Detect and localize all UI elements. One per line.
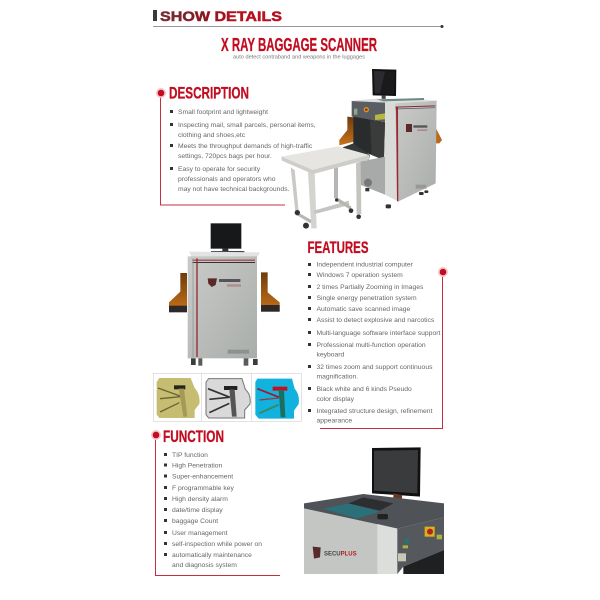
panel: function (151, 427, 280, 576)
panel: description (156, 84, 316, 205)
x-ray bag: grayscale (206, 379, 250, 418)
features list: Professional multi-function operation (316, 342, 426, 349)
features list: 32 times zoom and support continuous (316, 364, 433, 371)
features list: Assist to detect explosive and narcotics (316, 317, 435, 324)
photo: scanner console close-up (304, 447, 444, 574)
function list: TIP function (172, 452, 208, 459)
description list: Small footprint and lightweight (178, 109, 268, 116)
description list: Easy to operate for security (178, 166, 261, 173)
function list: self-inspection while power on (172, 541, 262, 548)
icon: function marker (151, 430, 161, 440)
function list: baggage Count (172, 518, 218, 525)
function list: F programmable key (172, 485, 235, 492)
function list: and diagnosis system (172, 562, 237, 569)
description list: Inspecting mail, small parcels, personal items, (178, 122, 316, 129)
photo: scanner console close-up: SECUPLUS (324, 551, 357, 557)
features list: Integrated structure design, refinement (316, 408, 433, 415)
features list: color display (316, 396, 355, 403)
features list: magnification. (316, 374, 358, 380)
function list: High density alarm (172, 496, 228, 503)
features list: Automatic save scanned image (316, 306, 411, 313)
function list: Super-enhancement (172, 474, 233, 480)
x-ray bag: yellow (157, 378, 200, 418)
function list (164, 452, 262, 569)
section header: show details (153, 8, 444, 28)
description list: Meets the throughput demands of high-traffic (178, 143, 313, 150)
features list: Black white and 6 kinds Pseudo (316, 386, 412, 393)
photo: scanner with table (281, 69, 442, 229)
icon: description marker (156, 88, 166, 98)
description list: clothing and shoes,etc (178, 132, 246, 139)
title: X RAY BAGGAGE SCANNER (221, 35, 377, 55)
photo: scanner front view (169, 223, 280, 366)
x-ray images strip (153, 373, 301, 421)
function heading: FUNCTION (163, 427, 224, 446)
description list: settings, 720pcs bags per hour. (178, 153, 272, 160)
features list: Multi-language software interface support (316, 330, 440, 337)
features list: Independent industrial computer (316, 262, 414, 268)
features list: Single energy penetration system (316, 295, 417, 302)
features list (308, 262, 440, 424)
description list: may not have technical backgrounds. (178, 186, 290, 193)
features list: 2 times Partially Zooming in Images (316, 284, 424, 291)
features list: Windows 7 operation system (316, 272, 403, 279)
description list: professionals and operators who (178, 176, 276, 183)
panel: features (308, 238, 448, 428)
function list: date/time display (172, 507, 223, 514)
section header: show details: SHOW DETAILS (160, 8, 282, 24)
icon: features marker (438, 267, 448, 277)
function list: High Penetration (172, 462, 223, 470)
features list: appearance (316, 418, 352, 424)
description list (170, 109, 316, 193)
function list: User management (172, 530, 228, 537)
description heading: DESCRIPTION (169, 84, 249, 102)
subtitle: auto detect contraband and weapons in the luggages (233, 54, 365, 60)
x-ray bag: pseudo colour (255, 379, 299, 419)
function list: automatically maintenance (172, 552, 252, 559)
features heading: FEATURES (308, 238, 368, 257)
features list: keyboard (316, 352, 345, 358)
